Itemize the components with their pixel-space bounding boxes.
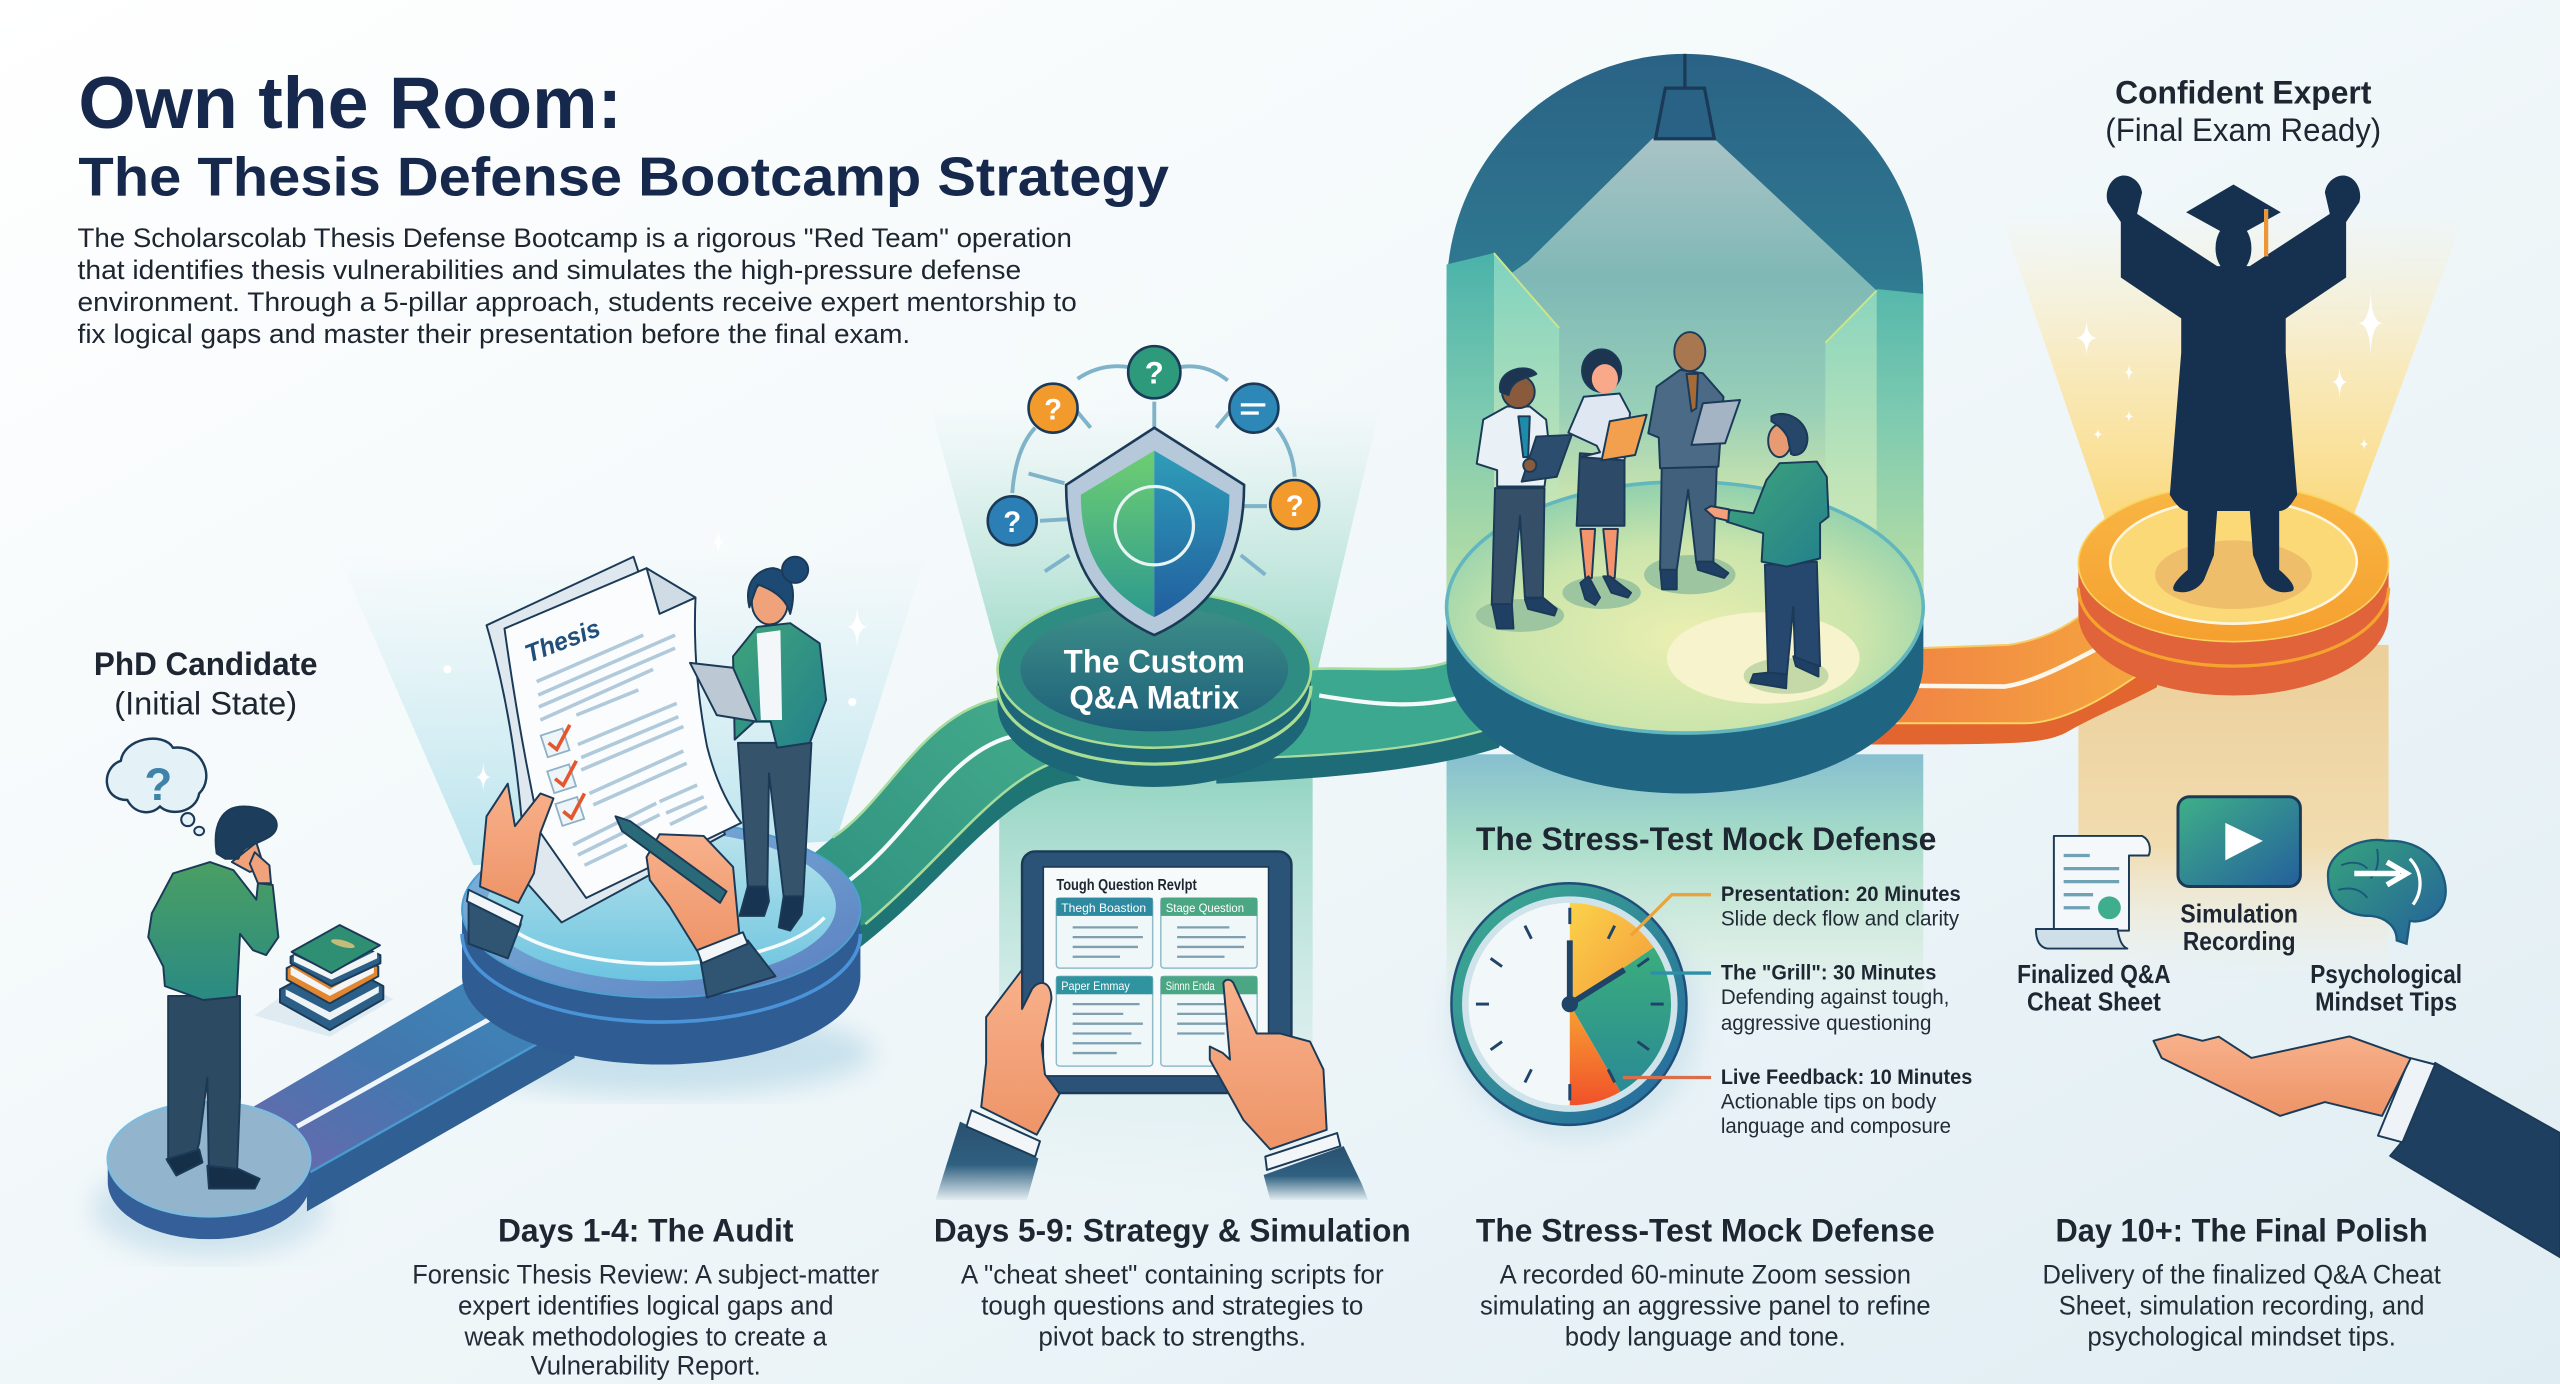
clock legend [1721, 883, 1972, 1138]
platform: audit disc [462, 821, 860, 1064]
road: green connector [1216, 656, 1512, 784]
spotlight lamp [1656, 54, 1714, 139]
icon: offering hand [2153, 1034, 2560, 1257]
checklist [541, 725, 584, 826]
tablet: tough question sheet: Tough Question Revlpt [1056, 877, 1197, 894]
thesis document [487, 557, 741, 922]
question bubble: top [1128, 346, 1180, 398]
heading: upper Stress-Test Mock Defense: The Stress-Test Mock Defense [1476, 820, 1936, 857]
connector: grill [1651, 972, 1711, 974]
question bubble: upper right [1229, 384, 1278, 433]
label: Confident Expert: Confident Expert [2115, 74, 2372, 111]
label: The Custom Q&A Matrix: The Custom [1064, 643, 1245, 680]
person: mentor holding tablet [690, 557, 826, 931]
clock segment: live feedback 10 minutes [1570, 1004, 1620, 1105]
column: Stress-Test Mock Defense: The Stress-Test Mock Defense [1476, 1212, 1935, 1249]
icon: brain with arrow [2328, 840, 2446, 944]
platform: start disc [108, 1102, 310, 1239]
column: Days 1-4: Days 1-4: The Audit [498, 1212, 794, 1249]
title: The Thesis Defense Bootcamp Strategy [78, 145, 1169, 207]
label: Confident Expert [2105, 74, 2381, 148]
tablet: tough question sheet: Stage Question [1166, 901, 1244, 915]
person: candidate seen from behind [1705, 414, 1829, 694]
column: Days 5-9: Days 5-9: Strategy & Simulation [934, 1212, 1411, 1249]
light beams [338, 212, 2465, 1195]
label: simulation recording [2180, 898, 2298, 956]
thesis title: Thesis [521, 614, 604, 668]
column: Days 5-9: tough questions and strategies to [981, 1290, 1363, 1320]
clock legend: The "Grill": 30 Minutes [1721, 962, 1936, 985]
question bubble: lower right [1270, 480, 1319, 529]
intro paragraph: The Scholarscolab Thesis Defense Bootcamp is a rigorous "Red Team" operation [78, 223, 1072, 253]
question bubble: top: ? [1145, 356, 1164, 391]
intro paragraph: fix logical gaps and master their presentation before the final exam. [78, 319, 910, 349]
tablet: tough question sheet: Paper Emmay [1061, 979, 1131, 993]
title [78, 63, 1169, 207]
clock legend: Presentation: 20 Minutes [1721, 883, 1961, 906]
intro paragraph: environment. Through a 5-pillar approach, students receive expert mentorship to [78, 287, 1077, 317]
column: Day 10+: Day 10+: The Final Polish [2056, 1212, 2428, 1249]
person: panelist in suit [1644, 332, 1740, 594]
ground shadows [91, 1011, 873, 1257]
person: panelist with orange clipboard [1562, 349, 1647, 609]
clock legend: Live Feedback: 10 Minutes [1721, 1066, 1972, 1089]
thought bubble [107, 739, 206, 835]
thought bubble: ? [144, 759, 172, 810]
clock legend: Defending against tough, [1721, 986, 1949, 1009]
shield [1066, 428, 1244, 635]
column: Days 1-4: expert identifies logical gaps and [458, 1290, 833, 1320]
column: Day 10+: Delivery of the finalized Q&A Cheat [2042, 1259, 2441, 1289]
label: PhD Candidate: (Initial State) [114, 684, 297, 721]
label: finalized Q&A cheat sheet [2017, 959, 2171, 1017]
column: Days 5-9: A "cheat sheet" containing scripts for [961, 1259, 1384, 1289]
column: Days 1-4 [412, 1212, 879, 1381]
icon: cheat sheet scroll [2036, 836, 2150, 949]
tablet: tough question sheet: Sinnn Enda [1166, 979, 1215, 993]
clock legend: language and composure [1721, 1115, 1951, 1138]
icon: play button [2178, 797, 2300, 887]
clock legend: Slide deck flow and clarity [1721, 908, 1960, 931]
label: simulation recording: Recording [2183, 926, 2296, 956]
label: psychological mindset tips: Mindset Tips [2315, 987, 2457, 1017]
column: Days 5-9 [934, 1212, 1411, 1351]
clock legend: aggressive questioning [1721, 1012, 1931, 1035]
column: Day 10+: psychological mindset tips. [2087, 1321, 2396, 1351]
road: blue path [253, 970, 575, 1211]
label: The Custom Q&A Matrix: Q&A Matrix [1069, 679, 1239, 716]
label: psychological mindset tips [2310, 959, 2462, 1017]
intro paragraph [78, 223, 1077, 349]
label: PhD Candidate [94, 645, 318, 721]
person: PhD candidate [148, 807, 278, 1189]
shield and question ring [988, 346, 1319, 635]
title: Own the Room: [78, 63, 622, 144]
column: Stress-Test Mock Defense [1476, 1212, 1935, 1351]
question bubble: lower left: ? [1003, 506, 1021, 539]
sparkles [443, 287, 2384, 793]
column: Days 1-4: Vulnerability Report. [531, 1351, 761, 1381]
tablet: tough question sheet: Thegh Boastion [1061, 901, 1146, 915]
question bubble: upper left: ? [1044, 394, 1062, 427]
column: Stress-Test Mock Defense: body language and tone. [1565, 1321, 1846, 1351]
platform: Q&A matrix disc [998, 591, 1311, 787]
label: simulation recording: Simulation [2180, 898, 2298, 928]
hands on thesis [467, 784, 776, 998]
column: Stress-Test Mock Defense: A recorded 60-minute Zoom session [1500, 1259, 1911, 1289]
question bubble: lower left [988, 496, 1037, 545]
road: green path [800, 697, 1081, 963]
label: finalized Q&A cheat sheet: Finalized Q&A [2017, 959, 2171, 989]
road: orange path [1842, 604, 2163, 744]
column: Stress-Test Mock Defense: simulating an aggressive panel to refine [1480, 1290, 1931, 1320]
clock chart: 60-minute session [1451, 883, 1711, 1140]
label: finalized Q&A cheat sheet: Cheat Sheet [2027, 987, 2161, 1017]
column: Day 10+: Sheet, simulation recording, and [2059, 1290, 2424, 1320]
column: Day 10+ [2042, 1212, 2441, 1351]
graduate silhouette [2107, 175, 2360, 592]
label: PhD Candidate: PhD Candidate [94, 645, 318, 682]
clock segment: presentation 20 minutes [1570, 903, 1654, 1004]
column: Days 5-9: pivot back to strengths. [1038, 1321, 1306, 1351]
connector: feedback [1623, 1077, 1711, 1079]
tablet: tough question sheet [1022, 851, 1291, 1093]
label: psychological mindset tips: Psychological [2310, 959, 2462, 989]
question bubble: lower right: ? [1286, 490, 1304, 523]
platform: confident expert disc [2078, 485, 2389, 696]
connector: presentation [1631, 895, 1711, 936]
column: Days 1-4: weak methodologies to create a [464, 1321, 827, 1351]
clock segment: grill 30 minutes [1570, 947, 1671, 1092]
intro paragraph: that identifies thesis vulnerabilities and simulates the high-pressure defense [78, 255, 1021, 285]
mock defense arch stage [1447, 54, 1923, 793]
label: Confident Expert: (Final Exam Ready) [2105, 111, 2381, 148]
hands holding tablet [936, 970, 1368, 1200]
column: Days 1-4: Forensic Thesis Review: A subject-matter [412, 1259, 879, 1289]
label: The Custom Q&A Matrix [1064, 643, 1245, 716]
books stack [255, 925, 393, 1037]
question bubble: upper left [1029, 384, 1078, 433]
person: panelist with dark clipboard [1476, 368, 1572, 632]
clock legend: Actionable tips on body [1721, 1091, 1937, 1114]
